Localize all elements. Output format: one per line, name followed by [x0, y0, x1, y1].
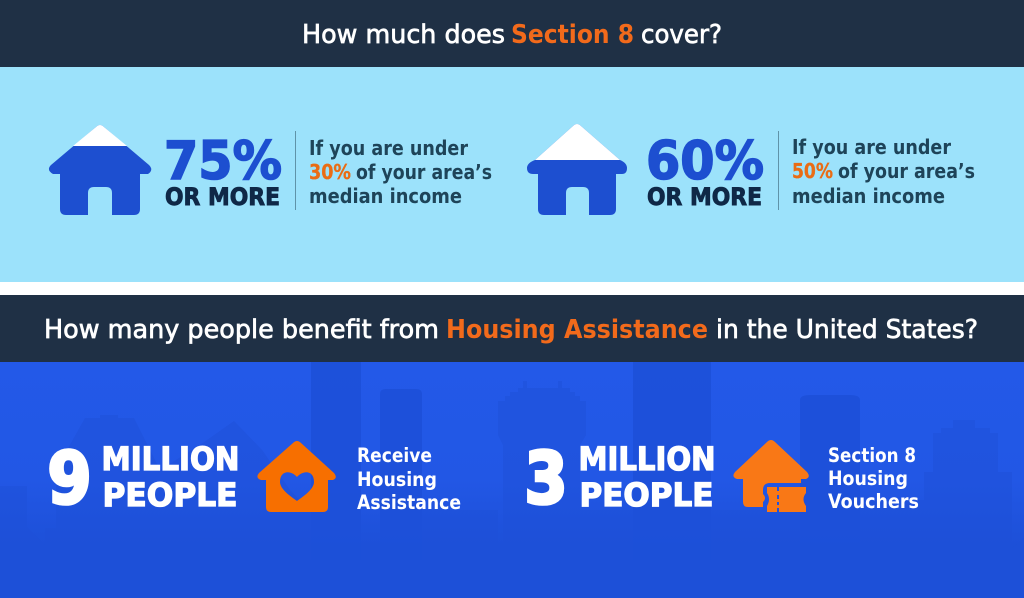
- stat: 3 million people: PEOPLE: [580, 476, 714, 514]
- text: section 8 housing vouchers: Vouchers: [828, 490, 919, 513]
- text: receive housing assistance: [357, 444, 461, 514]
- text: receive housing assistance: Assistance: [357, 491, 461, 514]
- stat: 9 million people: PEOPLE: [102, 476, 238, 514]
- stat: 75% or more: OR MORE: [165, 183, 280, 211]
- stat: 9 million people: MILLION: [102, 440, 240, 478]
- header bar: Section 8 coverage: [0, 0, 1024, 67]
- header bar: Section 8 coverage: Section 8: [511, 20, 634, 50]
- stat: 3 million people: MILLION: [578, 440, 716, 478]
- stat: 75% or more: 75%: [164, 131, 282, 192]
- header bar: Section 8 coverage: How much does: [302, 20, 505, 50]
- text: under 50% of median income: [792, 135, 975, 208]
- header bar: housing assistance beneficiaries: in the United States?: [716, 315, 978, 345]
- icon: house 60 percent filled: [527, 124, 627, 215]
- panel: coverage: [0, 67, 1024, 282]
- icon: orange house with heart: [257, 441, 336, 512]
- panel: beneficiaries: [0, 362, 1024, 598]
- text: under 30% of median income: [309, 136, 492, 208]
- stat: 3 million people: [524, 437, 716, 520]
- stat: 3 million people: 3: [524, 437, 568, 520]
- text: under 50% of median income: 50%: [792, 159, 833, 183]
- header bar: housing assistance beneficiaries: Housing Assistance: [446, 315, 708, 345]
- stat: 60% or more: OR MORE: [647, 183, 762, 211]
- text: section 8 housing vouchers: [828, 444, 919, 513]
- icon: house 75 percent filled: [49, 125, 151, 215]
- text: under 30% of median income: 30%: [309, 160, 351, 184]
- header bar: housing assistance beneficiaries: [0, 295, 1024, 362]
- header bar: housing assistance beneficiaries: How many people benefit from: [44, 315, 439, 345]
- header bar: Section 8 coverage: cover?: [641, 20, 722, 50]
- text: receive housing assistance: Receive: [357, 444, 432, 467]
- text: under 50% of median income: median income: [792, 184, 945, 208]
- stat: 9 million people: [48, 437, 240, 520]
- stat: 9 million people: 9: [48, 437, 92, 520]
- stat: 60% or more: 60%: [646, 131, 764, 192]
- text: receive housing assistance: Housing: [357, 468, 437, 491]
- icon: orange house with ticket voucher: [733, 440, 809, 512]
- text: section 8 housing vouchers: Housing: [828, 467, 908, 490]
- text: under 30% of median income: median income: [309, 184, 462, 208]
- text: under 50% of median income: If you are under: [792, 135, 952, 159]
- background city skyline: [0, 362, 1024, 560]
- text: section 8 housing vouchers: Section 8: [828, 444, 916, 467]
- text: under 30% of median income: of your area’s: [356, 160, 492, 184]
- text: under 30% of median income: If you are under: [309, 136, 469, 160]
- text: under 50% of median income: of your area’s: [838, 159, 975, 183]
